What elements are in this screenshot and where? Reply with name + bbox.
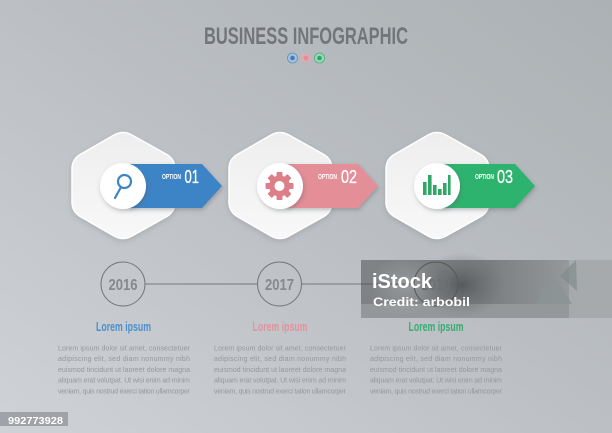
year 2017 <box>258 262 302 306</box>
year 2016: 2016 <box>108 277 138 294</box>
panel: option 01 <box>72 132 222 238</box>
hexagon 2 <box>229 132 332 238</box>
title dots <box>288 53 324 63</box>
option label 3: OPTION <box>475 174 494 181</box>
arrow 1 <box>128 164 222 208</box>
column 3 text <box>370 320 503 396</box>
icon: gear <box>266 172 294 200</box>
hexagon 1 <box>72 132 175 238</box>
body 1: euismod tincidunt ut laoreet dolore magna <box>58 367 190 374</box>
stock id badge: 992773928 <box>8 415 63 427</box>
body 3: euismod tincidunt ut laoreet dolore magna <box>370 367 502 374</box>
body 3 <box>370 346 503 396</box>
option label 2: OPTION <box>318 174 337 181</box>
body 1: veniam, quis nostrud exerci tation ullamcorper <box>58 388 191 396</box>
year 2016 <box>101 262 145 306</box>
body 2: euismod tincidunt ut laoreet dolore magna <box>214 367 346 374</box>
body 2 <box>214 346 347 396</box>
stock id badge <box>0 412 68 427</box>
body 3: adipiscing elit, sed diam nonummy nibh <box>370 356 502 363</box>
timeline <box>101 262 414 306</box>
watermark band <box>361 252 612 318</box>
icon: magnifier <box>115 175 131 198</box>
watermark credit: Credit: arbobil <box>373 295 470 309</box>
body 3: veniam, quis nostrud exerci tation ullamcorper <box>370 388 503 396</box>
circle 1 <box>100 163 146 209</box>
column 2 text <box>214 320 347 396</box>
heading 1: Lorem ipsum <box>96 320 151 334</box>
title: BUSINESS INFOGRAPHIC <box>204 23 408 50</box>
option label 1: OPTION <box>162 174 181 181</box>
hexagon 3 <box>386 132 489 238</box>
icon: bar chart <box>423 175 451 195</box>
heading 3: Lorem ipsum <box>408 320 464 334</box>
body 3: Lorem ipsum dolor sit amet, consectetuer <box>370 346 503 352</box>
year 2018: 2018 <box>422 277 451 294</box>
circle 3 <box>414 163 460 209</box>
year 2017: 2017 <box>265 277 294 294</box>
body 2: Lorem ipsum dolor sit amet, consectetuer <box>214 346 347 352</box>
number 02: 02 <box>341 167 357 187</box>
arrow 2 <box>285 164 378 208</box>
body 3: aliquam erat volutpat. Ut wisi enim ad minim <box>370 378 502 384</box>
watermark logo: iStock <box>372 271 433 293</box>
column 1 text <box>58 320 191 396</box>
body 1: adipiscing elit, sed diam nonummy nibh <box>58 356 190 363</box>
body 1: Lorem ipsum dolor sit amet, consectetuer <box>58 346 191 352</box>
body 2: adipiscing elit, sed diam nonummy nibh <box>214 356 346 363</box>
heading 2: Lorem ipsum <box>252 320 308 334</box>
panel: option 03 <box>386 132 535 238</box>
body 2: aliquam erat volutpat. Ut wisi enim ad minim <box>214 378 346 384</box>
body 1 <box>58 346 191 396</box>
panel: option 02 <box>229 132 378 238</box>
arrow 3 <box>442 164 535 208</box>
body 1: aliquam erat volutpat. Ut wisi enim ad minim <box>58 378 190 384</box>
number 03: 03 <box>497 167 513 187</box>
circle 2 <box>257 163 303 209</box>
number 01: 01 <box>184 167 199 187</box>
body 2: veniam, quis nostrud exerci tation ullamcorper <box>214 388 347 396</box>
